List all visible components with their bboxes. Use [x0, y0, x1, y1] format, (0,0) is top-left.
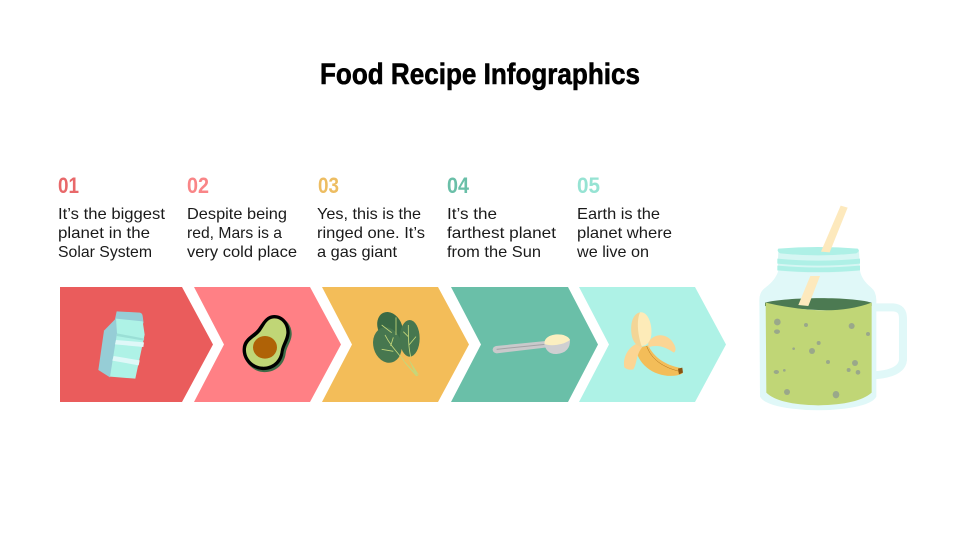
chevron 3	[322, 287, 469, 402]
step 4 text: 04	[447, 173, 470, 198]
icon: smoothie jar	[759, 206, 903, 410]
step 1 text	[58, 173, 166, 261]
icon: spinach	[369, 308, 420, 376]
drink surface	[765, 298, 872, 310]
step 1 text: Solar System	[58, 244, 152, 261]
step 2 text: very cold place	[187, 244, 297, 261]
step 5 text	[576, 173, 672, 261]
step 3 text: Yes, this is the	[317, 206, 421, 223]
step 2 text	[187, 173, 297, 261]
step 1 text: planet in the	[58, 225, 150, 242]
chevron 1	[60, 287, 213, 402]
step 5 text: planet where	[577, 225, 672, 242]
title: Food Recipe Infographics	[320, 58, 640, 91]
smoothie specks	[774, 319, 870, 398]
icon: measuring spoon	[493, 334, 570, 354]
drink liquid	[766, 303, 872, 405]
jar body	[759, 271, 876, 410]
straw upper	[821, 206, 848, 252]
step 4 text	[447, 173, 557, 261]
step 3 text: a gas giant	[317, 244, 398, 261]
step 5 text: Earth is the	[577, 206, 660, 223]
icon: banana	[624, 312, 683, 376]
chevron 5	[579, 287, 726, 402]
chevron 2	[194, 287, 341, 402]
step 1 text: 01	[58, 173, 79, 198]
step 3 text	[317, 173, 425, 261]
jar handle	[873, 307, 903, 375]
straw lower	[798, 276, 820, 306]
step 3 text: ringed one. It’s	[317, 225, 425, 242]
icon: avocado	[243, 315, 292, 372]
icon: milk carton	[98, 311, 145, 379]
step 2 text: Despite being	[187, 206, 287, 223]
step 4 text: from the Sun	[447, 244, 541, 261]
step 1 text: It’s the biggest	[58, 206, 166, 223]
step 2 text: 02	[187, 173, 209, 198]
jar lid	[777, 247, 860, 273]
step 4 text: It’s the	[447, 206, 497, 223]
step 5 text: 05	[577, 173, 600, 198]
step 4 text: farthest planet	[447, 225, 557, 242]
step 3 text: 03	[318, 173, 339, 198]
step 5 text: we live on	[576, 244, 649, 261]
step 2 text: red, Mars is a	[187, 225, 282, 242]
chevron 4	[451, 287, 598, 402]
